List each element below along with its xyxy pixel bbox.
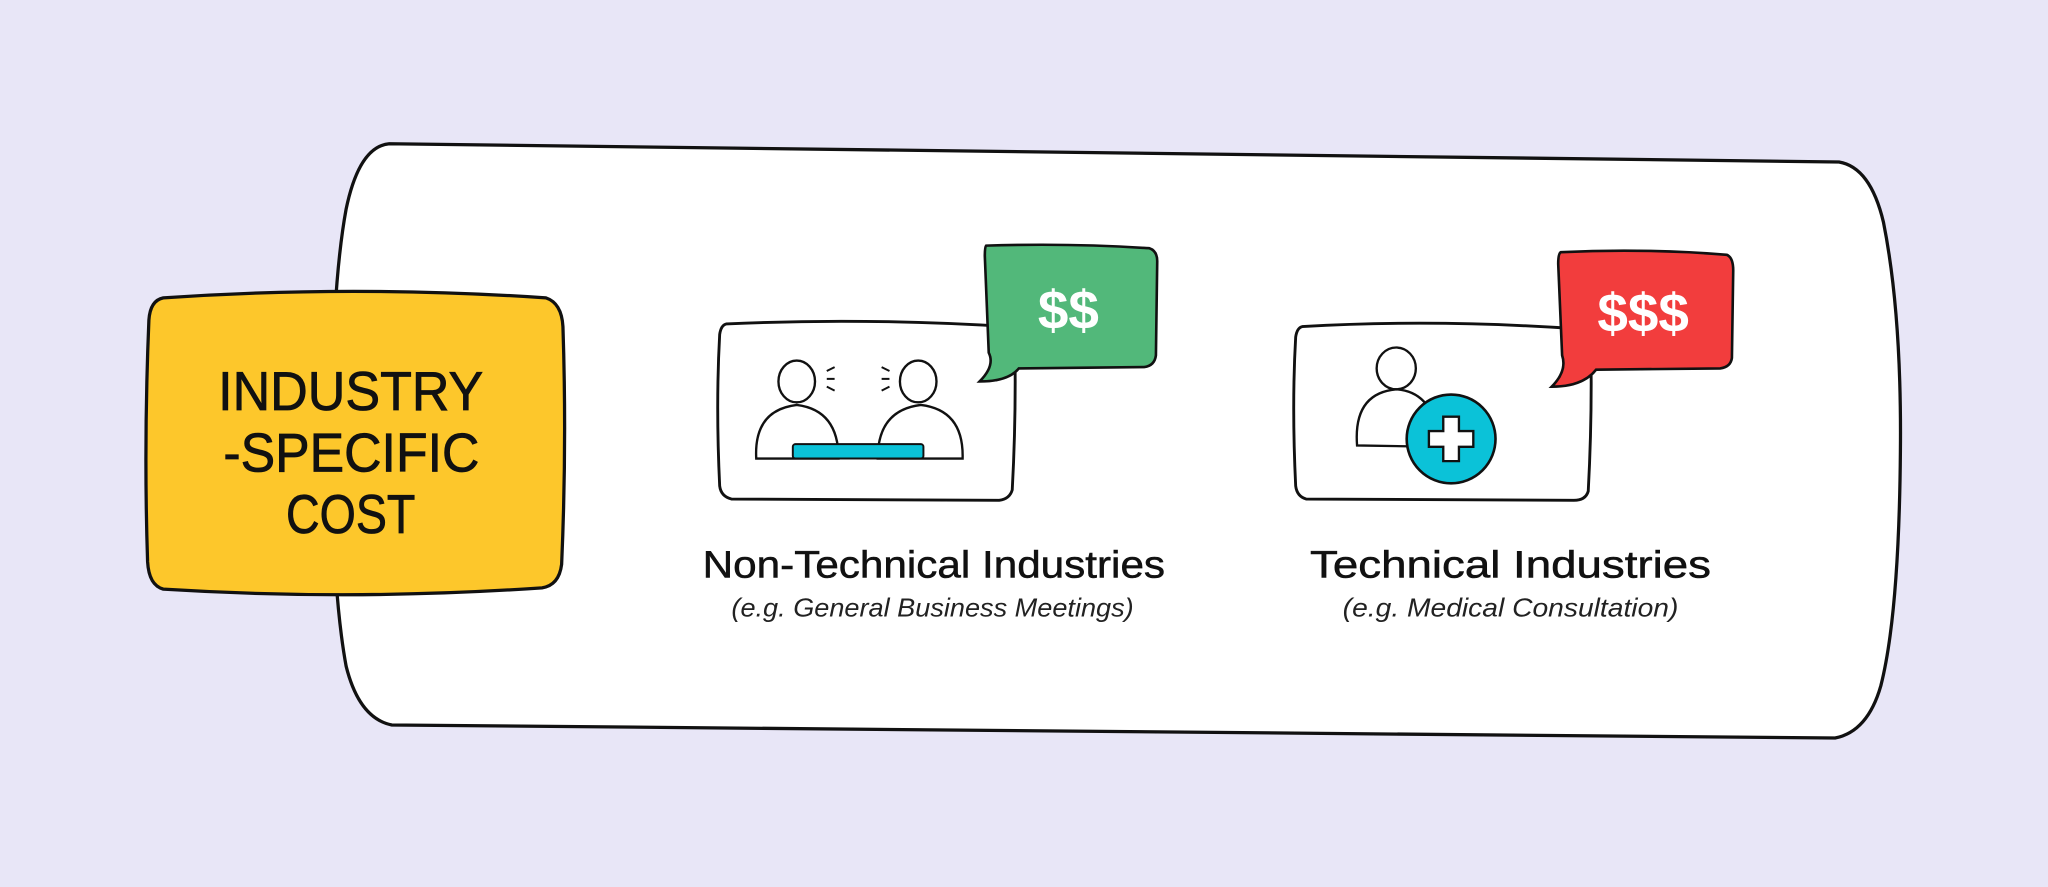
text: technical example: (e.g. Medical Consultation) (1343, 593, 1678, 623)
callout: $$$ red bubble: $$$ (1597, 282, 1689, 344)
text: technical label: Technical Industries (1310, 544, 1711, 586)
panel: non-technical (703, 245, 1165, 623)
callout: $$ green bubble (980, 245, 1157, 381)
heading: industry-specific cost (218, 360, 483, 545)
heading: industry-specific cost: INDUSTRY (218, 360, 483, 422)
callout: $$$ red bubble (1552, 251, 1733, 387)
callout: $$ green bubble: $$ (1038, 279, 1099, 341)
panel: industry-specific cost box (146, 291, 565, 595)
heading: industry-specific cost: -SPECIFIC (223, 422, 479, 484)
heading: industry-specific cost: COST (286, 483, 415, 545)
panel: main container (332, 144, 1900, 738)
panel: technical (1294, 251, 1733, 623)
text: non-technical label: Non-Technical Industries (703, 544, 1165, 586)
icon: screen with two people (718, 321, 1015, 500)
text: non-technical example: (e.g. General Business Meetings) (731, 593, 1134, 623)
icon: screen with doctor (1294, 323, 1591, 500)
